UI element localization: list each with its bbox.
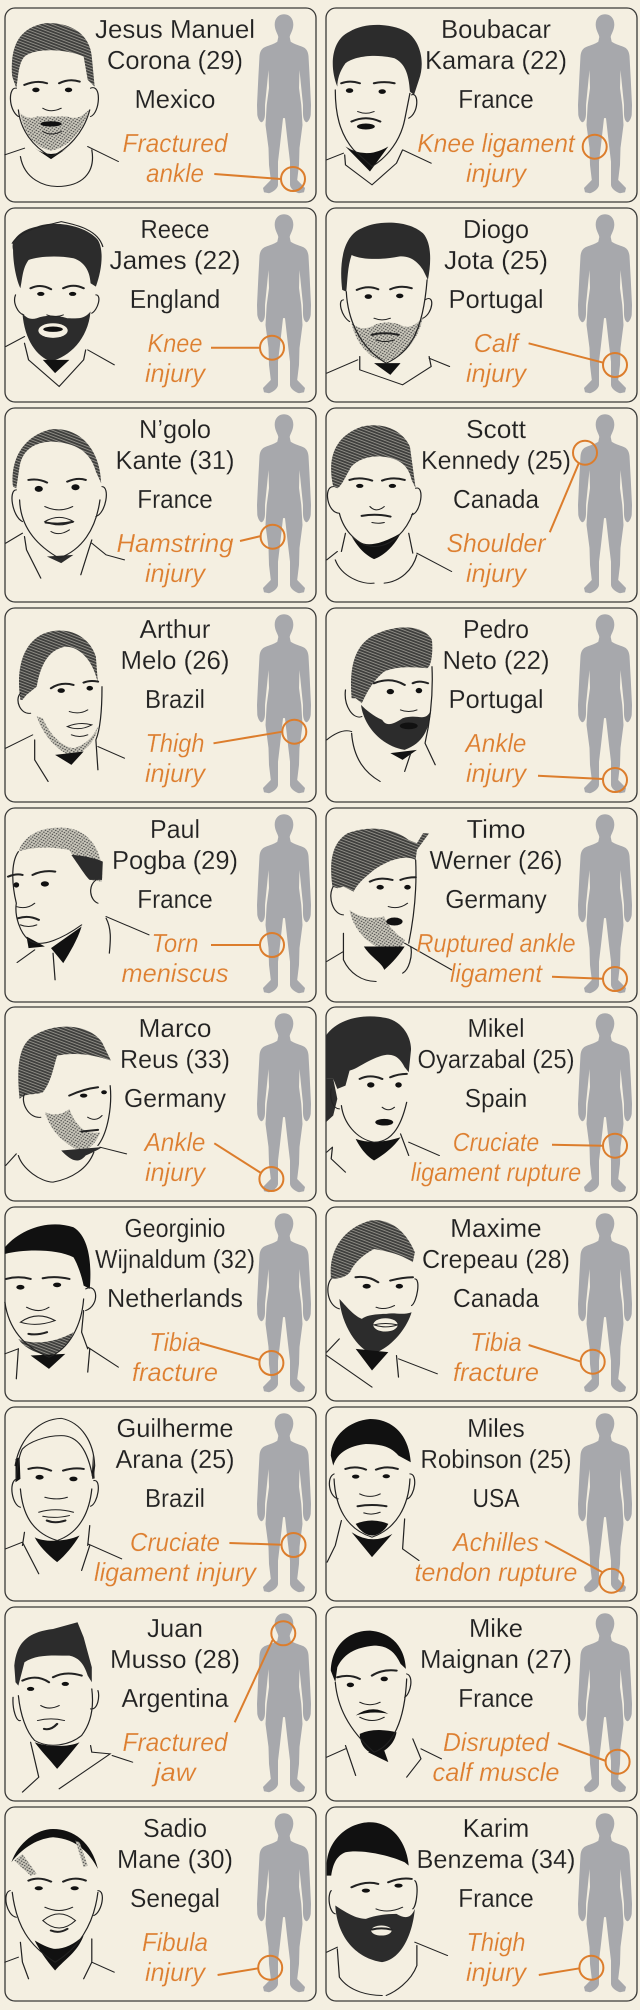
icon: body silhouette — [257, 1613, 311, 1792]
name line 2: Kante (31) — [116, 445, 234, 475]
injury: Hamstring — [116, 528, 234, 558]
card: Timo Werner — [326, 808, 637, 1002]
injury line 2: ligament — [450, 958, 544, 988]
name line 2: Kennedy (25) — [421, 445, 571, 475]
injury: Knee ligament — [417, 128, 576, 158]
country: Argentina — [122, 1683, 229, 1713]
name: Guilherme — [116, 1413, 234, 1443]
name line 2: Crepeau (28) — [422, 1244, 570, 1274]
name line 2: Werner (26) — [430, 845, 562, 875]
name: Marco — [138, 1013, 212, 1043]
portrait: Robinson — [327, 1419, 419, 1562]
injury line 2: ligament rupture — [411, 1157, 581, 1187]
injury marker — [529, 343, 627, 377]
portrait: Jota — [327, 223, 450, 385]
card: Maxime Crepeau — [326, 1207, 637, 1401]
card: Juan Musso — [5, 1607, 316, 1801]
country: Mexico — [134, 84, 216, 114]
card: Pedro Neto — [326, 608, 637, 802]
injury marker — [545, 1541, 623, 1593]
country: Canada — [453, 1283, 540, 1313]
injury line 2: meniscus — [122, 958, 228, 988]
icon: body silhouette — [578, 1213, 632, 1392]
portrait: Wijnaldum — [5, 1224, 118, 1379]
name line 2: Mane (30) — [117, 1844, 233, 1874]
injury: Ruptured ankle — [416, 928, 576, 958]
card: Karim Benzema — [326, 1807, 637, 2001]
name line 2: Benzema (34) — [416, 1844, 576, 1874]
name: Paul — [150, 814, 200, 844]
name: Reece — [140, 214, 210, 244]
injury marker — [211, 933, 284, 957]
name line 2: Robinson (25) — [420, 1444, 572, 1474]
country: USA — [472, 1483, 520, 1513]
name: Maxime — [450, 1213, 542, 1243]
name line 2: Neto (22) — [442, 645, 550, 675]
injury marker — [583, 135, 607, 159]
card: Miles Robinson — [326, 1407, 637, 1601]
injury marker — [552, 967, 627, 991]
injury marker — [538, 768, 627, 792]
injury marker — [558, 1743, 630, 1774]
name: Jesus Manuel — [95, 14, 255, 44]
injury: Thigh — [146, 728, 204, 758]
portrait: Werner — [327, 829, 452, 981]
injury line 2: ankle — [146, 158, 204, 188]
injury: Fractured — [122, 1727, 229, 1757]
injury line 2: jaw — [151, 1757, 198, 1787]
portrait: Maignan — [327, 1631, 441, 1777]
name: Mikel — [468, 1013, 524, 1043]
portrait: Oyarzabal — [326, 1016, 439, 1172]
country: Germany — [124, 1083, 226, 1113]
name line 2: Arana (25) — [116, 1444, 234, 1474]
name line 2: Reus (33) — [120, 1044, 230, 1074]
card: Paul Pogba — [5, 808, 316, 1002]
icon: body silhouette — [578, 614, 632, 793]
injury line 2: injury — [466, 358, 528, 388]
country: France — [137, 884, 213, 914]
injury marker — [240, 525, 285, 549]
injury: Achilles — [451, 1527, 539, 1557]
portrait: Corona — [5, 23, 118, 186]
injury line 2: injury — [466, 1957, 528, 1987]
icon: body silhouette — [257, 1213, 311, 1392]
injury line 2: injury — [145, 358, 207, 388]
injury marker — [539, 1956, 603, 1980]
injury: Ankle — [464, 728, 526, 758]
injury: Fibula — [142, 1927, 208, 1957]
name line 2: Kamara (22) — [425, 45, 567, 75]
country: England — [130, 284, 220, 314]
card: Reece James — [5, 208, 316, 402]
injury marker — [550, 441, 597, 532]
injury marker — [214, 720, 306, 744]
injury marker — [218, 1956, 282, 1980]
icon: body silhouette — [578, 1013, 632, 1192]
name line 2: Wijnaldum (32) — [95, 1244, 255, 1274]
name: Timo — [466, 814, 526, 844]
icon: body silhouette — [257, 214, 311, 393]
injury line 2: calf muscle — [432, 1757, 560, 1787]
injury marker — [211, 336, 284, 360]
country: France — [458, 1883, 534, 1913]
card: Marco Reus — [5, 1007, 316, 1201]
country: Canada — [453, 484, 540, 514]
country: Portugal — [448, 684, 544, 714]
injury: Thigh — [466, 1927, 526, 1957]
name line 2: Jota (25) — [444, 245, 548, 275]
injury: Disrupted — [443, 1727, 550, 1757]
injury line 2: ligament injury — [94, 1557, 258, 1587]
icon: body silhouette — [257, 814, 311, 993]
name line 2: Pogba (29) — [112, 845, 238, 875]
card: Mikel Oyarzabal — [326, 1007, 637, 1201]
name line 2: Corona (29) — [107, 45, 243, 75]
icon: body silhouette — [578, 1413, 632, 1592]
injury: Tibia — [470, 1327, 522, 1357]
name: Arthur — [140, 614, 211, 644]
name line 2: Musso (28) — [110, 1644, 240, 1674]
icon: body silhouette — [578, 214, 632, 393]
injury: Tibia — [149, 1327, 201, 1357]
injury line 2: injury — [145, 1957, 207, 1987]
country: Brazil — [145, 684, 205, 714]
injury line 2: fracture — [132, 1357, 218, 1387]
portrait: Kennedy — [327, 425, 452, 583]
injury line 2: injury — [466, 158, 528, 188]
portrait: Melo — [6, 631, 124, 781]
injury marker — [552, 1134, 627, 1158]
injury line 2: fracture — [453, 1357, 539, 1387]
country: Netherlands — [107, 1283, 243, 1313]
injury: Ankle — [143, 1127, 206, 1157]
country: Portugal — [448, 284, 544, 314]
name line 2: Maignan (27) — [420, 1644, 572, 1674]
country: France — [137, 484, 213, 514]
icon: body silhouette — [578, 1813, 632, 1992]
name line 2: Oyarzabal (25) — [418, 1044, 574, 1074]
injury marker — [235, 1621, 295, 1722]
portrait: Reus — [6, 1027, 126, 1182]
injury: Calf — [474, 328, 521, 358]
name line 2: Melo (26) — [120, 645, 230, 675]
icon: body silhouette — [257, 1013, 311, 1192]
injury: Torn — [152, 928, 198, 958]
icon: body silhouette — [257, 14, 311, 193]
card: Jesus Manuel Corona — [5, 8, 316, 202]
name: Mike — [469, 1613, 523, 1643]
portrait: Kante — [6, 429, 124, 578]
injury: Shoulder — [446, 528, 547, 558]
injury: Fractured — [122, 128, 229, 158]
injury: Cruciate — [130, 1527, 220, 1557]
name: Sadio — [143, 1813, 207, 1843]
name: Boubacar — [441, 14, 551, 44]
card: Diogo Jota — [326, 208, 637, 402]
portrait: Pogba — [8, 828, 149, 980]
country: France — [458, 84, 534, 114]
name: Diogo — [463, 214, 529, 244]
injury marker — [214, 167, 305, 191]
card: Mike Maignan — [326, 1607, 637, 1801]
country: Senegal — [130, 1883, 220, 1913]
name: Karim — [463, 1813, 529, 1843]
name: Georginio — [124, 1213, 226, 1243]
portrait: Musso — [13, 1622, 133, 1792]
card: Boubacar Kamara — [326, 8, 637, 202]
card: Georginio Wijnaldum — [5, 1207, 316, 1401]
injury line 2: injury — [145, 1157, 207, 1187]
icon: body silhouette — [578, 814, 632, 993]
injury marker — [200, 1343, 283, 1375]
name: Miles — [467, 1413, 525, 1443]
icon: body silhouette — [257, 1813, 311, 1992]
name: Scott — [466, 414, 527, 444]
portrait: James — [6, 222, 114, 386]
injury line 2: injury — [466, 758, 528, 788]
injury marker — [229, 1533, 306, 1557]
country: Spain — [465, 1083, 527, 1113]
name: Pedro — [463, 614, 529, 644]
injury: Cruciate — [453, 1127, 539, 1157]
portrait: Kamara — [327, 25, 431, 185]
card: Guilherme Arana — [5, 1407, 316, 1601]
portrait: Benzema — [327, 1822, 447, 1995]
injury line 2: injury — [466, 558, 528, 588]
name: Juan — [147, 1613, 203, 1643]
portrait: Crepeau — [327, 1220, 437, 1387]
injury marker — [529, 1345, 605, 1374]
injury marker — [214, 1143, 283, 1191]
icon: body silhouette — [578, 414, 632, 593]
country: France — [458, 1683, 534, 1713]
card: Scott Kennedy — [326, 408, 637, 602]
icon: body silhouette — [257, 1413, 311, 1592]
card: N'golo Kante — [5, 408, 316, 602]
card: Sadio Mane — [5, 1807, 316, 2001]
portrait: Neto — [327, 627, 435, 781]
icon: body silhouette — [578, 14, 632, 193]
icon: body silhouette — [578, 1613, 632, 1792]
country: Germany — [445, 884, 547, 914]
injury line 2: tendon rupture — [414, 1557, 578, 1587]
country: Brazil — [145, 1483, 205, 1513]
card: Arthur Melo — [5, 608, 316, 802]
icon: body silhouette — [257, 614, 311, 793]
injury: Knee — [148, 328, 202, 358]
injury line 2: injury — [145, 758, 207, 788]
portrait: Mane — [5, 1829, 114, 1979]
icon: body silhouette — [257, 414, 311, 593]
name: N’golo — [139, 414, 211, 444]
injury line 2: injury — [145, 558, 207, 588]
name line 2: James (22) — [110, 245, 240, 275]
portrait: Arana — [6, 1418, 122, 1574]
